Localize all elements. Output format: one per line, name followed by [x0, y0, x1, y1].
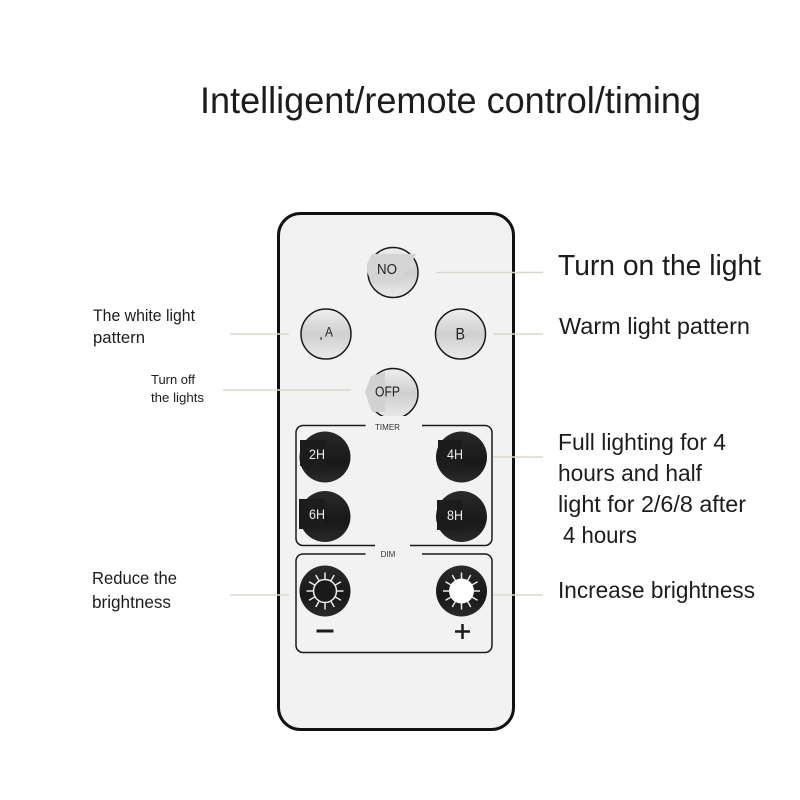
label: reduce the brightness: Reduce the	[92, 568, 177, 588]
button: 8H	[436, 491, 487, 542]
label: turn off the lights: the lights	[151, 390, 204, 405]
label: turn off the lights: Turn off	[151, 372, 195, 387]
button: 8H: 8H	[447, 507, 463, 523]
label: DIM: DIM	[381, 550, 396, 559]
button: 4H: 4H	[447, 446, 463, 462]
label: reduce the brightness: brightness	[92, 592, 171, 612]
label: white light pattern: The white light	[93, 307, 195, 325]
label: white light pattern: pattern	[93, 329, 145, 347]
button: B: B	[456, 324, 465, 344]
button: A: A	[325, 324, 333, 340]
label: turn on the light: Turn on the light	[558, 250, 761, 282]
label: white light pattern	[93, 307, 195, 347]
button: A	[301, 309, 351, 359]
label: timer description: light for 2/6/8 after	[558, 491, 746, 517]
panel: remote control body	[278, 214, 514, 730]
button: 2H	[300, 432, 350, 482]
button: B	[436, 309, 486, 359]
button: NO	[367, 248, 418, 298]
label: increase brightness: Increase brightness	[558, 577, 755, 603]
button: decrease brightness	[300, 566, 350, 616]
leader line: increase brightness	[493, 594, 543, 596]
button: increase brightness	[436, 566, 487, 616]
button: 6H	[299, 491, 350, 542]
button: 2H: 2H	[309, 446, 325, 462]
label: timer description	[558, 429, 746, 548]
leader line: warm light	[493, 333, 543, 335]
panel: timer group	[296, 423, 492, 546]
label: timer description: Full lighting for 4	[558, 429, 726, 455]
leader line: timer	[493, 456, 543, 458]
button: 4H	[436, 432, 487, 482]
label: TIMER: TIMER	[375, 423, 400, 432]
label: turn off the lights	[151, 372, 204, 405]
leader line: white light	[230, 333, 289, 335]
leader line: turn off	[223, 389, 351, 391]
icon: minus	[316, 630, 334, 632]
leader line: reduce brightness	[230, 594, 289, 596]
leader line: turn on the light	[436, 272, 543, 274]
label: timer description: 4 hours	[563, 522, 637, 548]
label: warm light pattern: Warm light pattern	[559, 313, 750, 339]
panel: dim group	[296, 550, 492, 652]
button: NO: NO	[377, 261, 397, 278]
button: 6H: 6H	[309, 506, 325, 522]
button: OFP	[365, 368, 418, 421]
label: timer description: hours and half	[558, 460, 703, 486]
icon: plus	[455, 624, 470, 639]
title: Intelligent/remote control/timing	[200, 80, 701, 121]
button: OFP: OFP	[375, 384, 400, 400]
label: reduce the brightness	[92, 568, 177, 612]
